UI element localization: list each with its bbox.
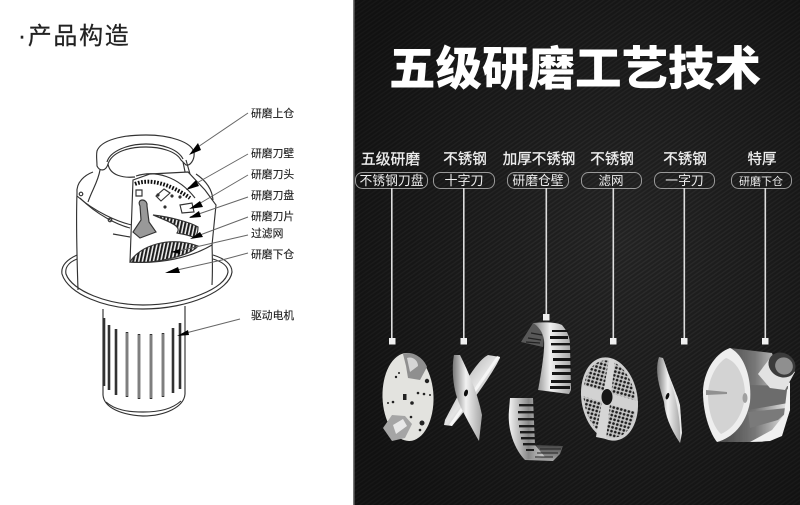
main title: 五级研磨工艺技术 bbox=[389, 32, 761, 99]
part labels: 研磨上仓 bbox=[251, 106, 294, 120]
part labels: 研磨刀盘 bbox=[251, 188, 294, 202]
section heading: product structure: ·产品构造 bbox=[18, 23, 130, 50]
part: filter screen disc bbox=[575, 353, 644, 445]
column 6: lower chamber label bbox=[732, 151, 792, 344]
column 5: straight blade label: 不锈钢 bbox=[663, 151, 707, 168]
part: cross blade bbox=[444, 355, 500, 441]
product cutaway line drawing bbox=[62, 135, 232, 416]
leader: drive motor bbox=[177, 319, 240, 336]
part labels: 研磨刀壁 bbox=[251, 146, 294, 160]
part: upper chamber wall comb bbox=[521, 322, 571, 394]
column 1: disc label bbox=[356, 151, 428, 344]
column 4: filter label: 滤网 bbox=[598, 174, 624, 188]
left white panel bbox=[0, 0, 354, 505]
column 3: chamber wall label: 加厚不锈钢 bbox=[503, 151, 575, 168]
column 1: disc label: 不锈钢刀盘 bbox=[360, 173, 424, 188]
leader: chamber wall bbox=[186, 154, 248, 190]
column 2: cross blade label: 不锈钢 bbox=[443, 151, 487, 168]
column 3: chamber wall label: 研磨仓壁 bbox=[512, 173, 564, 188]
column 6: lower chamber label: 研磨下仓 bbox=[739, 174, 783, 188]
part labels: 过滤网 bbox=[251, 227, 283, 240]
column 2: cross blade label bbox=[434, 151, 494, 344]
leader lines with arrowheads bbox=[165, 113, 248, 336]
leader: cutter head bbox=[189, 175, 248, 209]
flange plate bbox=[62, 255, 232, 309]
column 5: straight blade label bbox=[654, 151, 714, 344]
column 4: filter label: 不锈钢 bbox=[590, 151, 634, 168]
top hopper ring bbox=[88, 135, 204, 204]
column 4: filter label bbox=[582, 151, 642, 344]
part labels: 研磨下仓 bbox=[251, 247, 294, 261]
leader: upper chamber bbox=[189, 113, 248, 155]
cutaway interior bbox=[130, 172, 216, 262]
column 3: chamber wall label bbox=[503, 151, 575, 320]
leader: cutter disc bbox=[189, 197, 248, 218]
part: lower chamber wall comb bbox=[509, 398, 563, 461]
leader: filter screen bbox=[171, 235, 248, 254]
main cylinder body bbox=[77, 172, 213, 290]
motor housing bbox=[103, 306, 185, 416]
leader: lower chamber bbox=[165, 253, 248, 273]
column 1: disc label: 五级研磨 bbox=[361, 151, 420, 168]
column 6: lower chamber label: 特厚 bbox=[748, 151, 776, 168]
right dark panel bbox=[353, 0, 800, 505]
leader: cutter blade bbox=[190, 217, 248, 239]
part: cutter disc bbox=[381, 352, 435, 442]
column 5: straight blade label: 一字刀 bbox=[665, 173, 704, 188]
column 2: cross blade label: 十字刀 bbox=[444, 173, 484, 188]
part labels bbox=[251, 106, 294, 322]
part labels: 驱动电机 bbox=[251, 308, 294, 322]
part: straight blade bbox=[657, 357, 682, 443]
part: lower chamber housing bbox=[703, 348, 800, 442]
part labels: 研磨刀片 bbox=[251, 210, 294, 223]
part labels: 研磨刀头 bbox=[251, 168, 294, 181]
